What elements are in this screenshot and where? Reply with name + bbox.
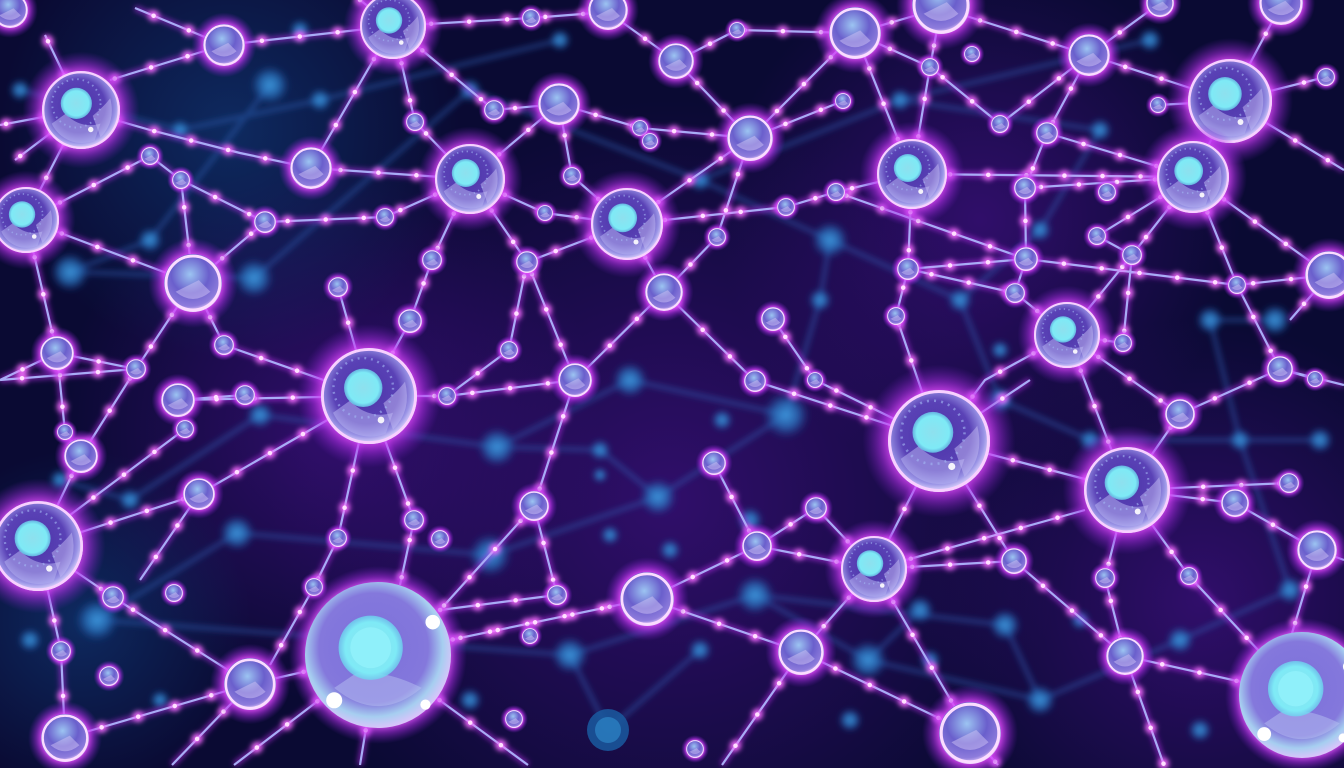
dim background node [587, 709, 629, 751]
small nodes: central band [31, 252, 1327, 482]
small nodes: lower middle band [96, 444, 1344, 614]
large glass nodes [0, 0, 1293, 618]
foreground pale node: bottom right [1225, 618, 1344, 768]
small nodes: bottom band [28, 557, 1154, 768]
small nodes: top band [0, 0, 1340, 201]
small nodes: upper band [136, 142, 1344, 328]
foreground pale node: bottom centre [289, 566, 467, 744]
